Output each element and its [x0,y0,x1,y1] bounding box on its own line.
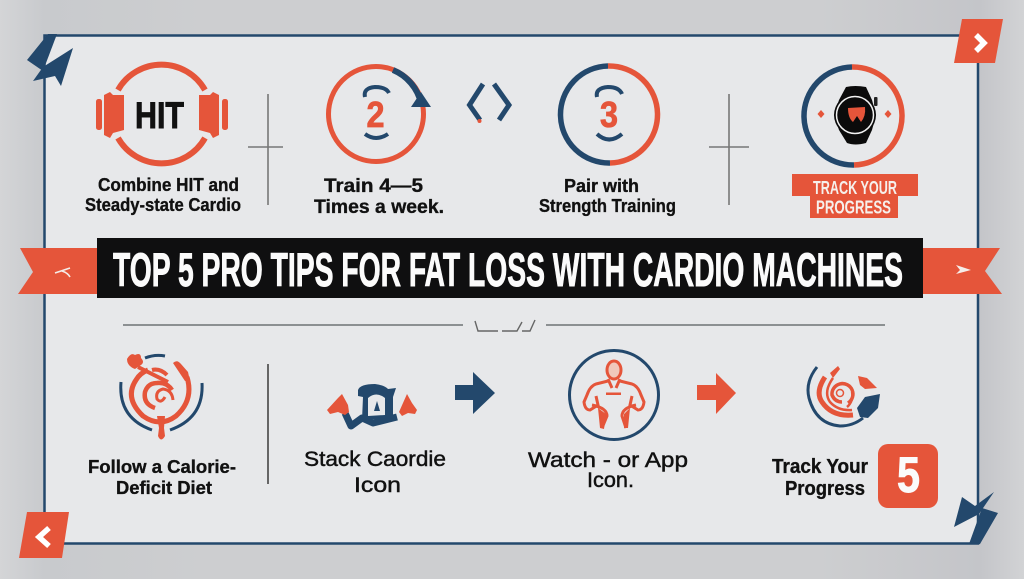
divider cross 2 [709,94,749,205]
icon: bottom-right corner darts [954,492,998,544]
divider line with squiggle [123,320,885,331]
text: tip 1 label: Combine HIT and [98,174,239,195]
icon: HIT headphones: HIT [135,95,184,136]
text: tip 8 label: Progress [785,478,865,500]
text: tip 3 label [539,175,676,216]
tip 5: calorie deficit [88,354,236,498]
text: watch label: Icon. [587,469,634,492]
text: tip 5 label: Follow a Calorie- [88,456,236,477]
tip 4: track your progress [792,67,918,218]
text: watch label [528,449,688,492]
text: tip 1 label [85,174,241,215]
icon: top-right corner tag [954,19,1003,63]
icon: progress spiral [808,366,880,426]
ribbon: left tail [18,248,97,294]
text: tip 5 label: Deficit Diet [116,477,212,498]
icon: smartwatch ring [804,67,902,165]
text: tip 3 label: Strength Training [539,195,676,216]
icon: calorie spiral [121,354,202,440]
icon: code chevrons [470,84,509,123]
stack cardio [304,384,446,497]
arrow: red [697,373,736,414]
icon: number 2 ring [328,66,431,162]
text: tip 2 label [314,175,444,218]
tip 2: train 4-5 times [314,66,444,218]
arrow: blue [455,372,495,414]
text: tip 8 label [772,456,868,500]
text: tip 2 label: Times a week. [314,196,444,218]
icon: number 2 ring: 2 [366,94,384,135]
label: track your progress banner: TRACK YOUR [813,178,897,198]
icon: stack cardio [327,384,417,426]
text: tip 5 label [88,456,236,498]
text: tip 1 label: Steady-state Cardio [85,194,241,215]
icon: number 3 ring: 3 [600,94,618,135]
text: stack cardio label: Stack Caordie [304,448,446,471]
badge: number 5: 5 [897,447,920,503]
icon: top-left corner darts [27,34,73,86]
ribbon: right tail [923,248,1002,294]
label: track your progress banner [792,174,918,218]
text: tip 2 label: Train 4—5 [324,175,423,197]
divider cross 1 [248,94,283,205]
tip 1: combine HIT [85,65,241,215]
vertical divider [267,364,269,484]
label: track your progress banner: PROGRESS [816,198,891,218]
text: watch label: Watch - or App [528,449,688,472]
icon: muscle figure [570,350,658,440]
tip 8: track your progress with 5 [772,366,938,508]
badge: number 5 [878,444,938,508]
icon: HIT headphones [96,65,228,163]
panel: main frame [44,36,978,544]
text: stack cardio label [304,448,446,497]
text: tip 3 label: Pair with [564,175,639,196]
text: stack cardio label: Icon [354,474,401,497]
text: tip 8 label: Track Your [772,456,868,478]
icon: bottom-left corner tag [19,512,69,558]
watch or app [528,350,688,492]
icon: number 3 ring [560,66,658,163]
tip 3: strength training [539,66,676,216]
